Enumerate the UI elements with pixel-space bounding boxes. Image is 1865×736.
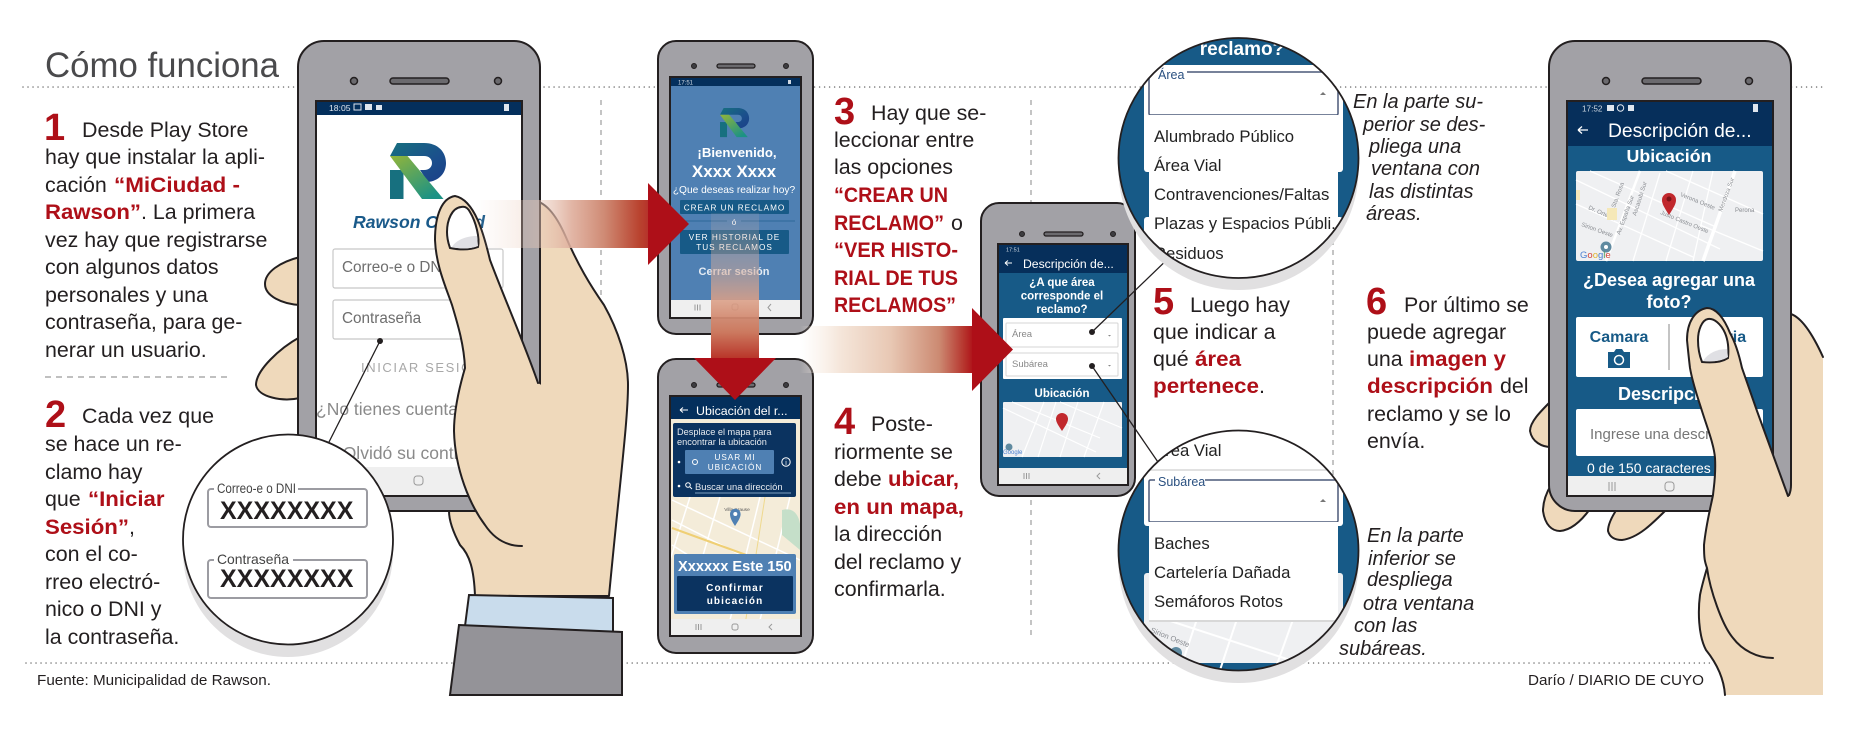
- photo options card: Galeria: [1692, 329, 1746, 346]
- magnifier shadow: [1118, 443, 1358, 683]
- hand back: left fingers: [256, 257, 300, 399]
- step 1 copy: cación: [45, 173, 113, 197]
- jacket sleeve: [450, 625, 622, 695]
- header: [670, 396, 801, 419]
- step 2 copy: con el co-: [45, 542, 138, 566]
- character counter: 0 de 150 caracteres (máx): [1587, 460, 1750, 476]
- text block: step 6: [1366, 281, 1529, 453]
- app name: Rawson Ciudad: [353, 212, 486, 232]
- step 6 copy: descripción: [1367, 374, 1493, 398]
- step 4 copy: ubicar,: [888, 467, 959, 491]
- number 5: 5: [1153, 281, 1174, 323]
- magnifier: subarea dropdown: [1118, 425, 1359, 683]
- credit: Darío / DIARIO DE CUYO: [1528, 672, 1704, 689]
- arrow: step 3 to step 4: [711, 213, 759, 358]
- annotation: bottom dropdown: subáreas.: [1339, 638, 1427, 660]
- step 2 copy: “Iniciar: [88, 487, 164, 511]
- map: Verona Oeste: [1679, 192, 1716, 212]
- arrow: step 1 to step 3: [475, 200, 648, 248]
- description input: Ingrese una descripción: [1590, 426, 1749, 443]
- instructions panel: USAR MI: [714, 453, 756, 462]
- status bar: 17:51: [678, 80, 694, 86]
- divider with letter o: [675, 218, 795, 227]
- screen background: [670, 77, 801, 318]
- map: Sirion Oeste: [1580, 222, 1614, 239]
- photo options card: [1576, 317, 1763, 377]
- dotted rule bottom: [26, 662, 1713, 664]
- step 6 copy: Por último se: [1404, 293, 1529, 317]
- column divider 1: [600, 100, 602, 636]
- step 4 copy: Poste-: [871, 412, 933, 436]
- magnifier content: [1118, 38, 1359, 287]
- text block: step 2: [45, 394, 214, 649]
- earpiece and sensors: [1602, 78, 1752, 84]
- step 2 copy: Sesión”: [45, 515, 129, 539]
- divider with letter o: ó: [732, 218, 737, 227]
- step 5 copy: que indicar a: [1153, 320, 1276, 344]
- step 4 copy: confirmarla.: [834, 577, 946, 601]
- instructions panel: i: [785, 460, 787, 467]
- number 6: 6: [1366, 281, 1387, 323]
- step 4 copy: la dirección: [834, 522, 942, 546]
- text block: step 3: [834, 91, 986, 317]
- phone body: [658, 359, 813, 653]
- status bar: 18:05: [329, 103, 351, 113]
- step 3 copy: o: [951, 211, 963, 235]
- nav bar: [671, 300, 800, 317]
- step 1 copy: Desde Play Store: [82, 118, 248, 142]
- instructions panel: Desplace el mapa para: [677, 427, 772, 437]
- dropdown options: Baches: [1154, 534, 1210, 553]
- field: password: XXXXXXXX: [220, 565, 354, 593]
- dropdown options: Alumbrado Público: [1154, 127, 1294, 146]
- annotation: top dropdown: pliega una: [1368, 136, 1461, 158]
- description heading: Descripción: [1618, 384, 1721, 404]
- dropdown options: Residuos: [1154, 244, 1224, 263]
- illustration: hand holding phone 5: [1530, 41, 1823, 695]
- header: Ubicación del r...: [696, 404, 788, 418]
- step 3 copy: RECLAMOS”: [834, 293, 956, 317]
- text block: step 5: [1153, 281, 1290, 398]
- annotation: top dropdown: ventana con: [1371, 158, 1480, 180]
- photo question: ¿Desea agregar una: [1583, 270, 1756, 290]
- small map: Google: [1003, 450, 1023, 456]
- dropdown options: [1149, 115, 1340, 272]
- wrist outline: [1699, 568, 1725, 695]
- address panel: ubicación: [707, 596, 763, 607]
- step 6 copy: envía.: [1367, 429, 1425, 453]
- map: Justo Castro Oeste: [1659, 210, 1710, 235]
- instructions panel: encontrar la ubicación: [677, 437, 767, 447]
- question: [1021, 277, 1103, 316]
- map: Google: [1580, 250, 1611, 261]
- arrow head: step 3 to step 4: [694, 358, 776, 400]
- magnifier: login fields: [183, 434, 393, 657]
- dropdown options: Plazas y Espacios Públi..: [1154, 214, 1340, 233]
- step 6 copy: del: [1500, 374, 1529, 398]
- location heading: Ubicación: [1627, 146, 1711, 166]
- leader line to top magnifier: [1089, 252, 1175, 335]
- step 2 copy: rreo electró-: [45, 570, 160, 594]
- step 6 copy: una: [1367, 347, 1409, 371]
- step 3 copy: “CREAR UN: [834, 183, 948, 207]
- button: ver historial: TUS RECLAMOS: [696, 243, 773, 252]
- app logo: [390, 143, 446, 199]
- magnifier content: [1118, 425, 1359, 671]
- header: Descripción de...: [1023, 257, 1114, 271]
- input: password: Contraseña: [342, 310, 422, 327]
- magnifier: area dropdown: [1118, 38, 1359, 290]
- address panel: Confirmar: [706, 583, 764, 594]
- instructions panel: Buscar una dirección: [695, 481, 783, 492]
- select card: Subárea: [1012, 359, 1049, 370]
- sign out: Cerrar sesión: [699, 266, 770, 278]
- earpiece and sensors: [350, 78, 502, 84]
- field: email: XXXXXXXX: [220, 497, 354, 525]
- address panel: [674, 554, 796, 614]
- step 2 copy: nico o DNI y: [45, 597, 162, 621]
- question: ¿Que deseas realizar hoy?: [673, 185, 795, 196]
- step 1 copy: hay que instalar la apli-: [45, 145, 265, 169]
- forgot link: ¿Olvidó su contraseña?: [332, 443, 517, 463]
- magnifier lens: [183, 434, 393, 644]
- step 2 copy: se hace un re-: [45, 432, 182, 456]
- step 2 copy: clamo hay: [45, 460, 143, 484]
- button: crear reclamo: CREAR UN RECLAMO: [684, 204, 785, 212]
- step 1 copy: “MiCiudad -: [114, 173, 240, 197]
- map: Perona: [1735, 208, 1755, 214]
- annotation: bottom dropdown: En la parte: [1367, 525, 1464, 547]
- dropdown options: [1149, 522, 1338, 621]
- nav bar: [1567, 476, 1773, 496]
- card: [1144, 425, 1343, 526]
- step 1 copy: con algunos datos: [45, 255, 219, 279]
- header: Descripción de...: [1608, 121, 1752, 142]
- hand back: palm fill: [1699, 313, 1823, 695]
- phone 3: map location: [658, 359, 813, 653]
- step 5 copy: área: [1195, 347, 1242, 371]
- thumb outline: [435, 196, 538, 546]
- annotation: top dropdown: perior se des-: [1362, 114, 1486, 136]
- map label and pin: [724, 507, 750, 526]
- phone body: [658, 41, 813, 334]
- text block: step 1: [44, 107, 267, 362]
- screen: [316, 101, 522, 496]
- small map: [1003, 402, 1122, 457]
- step 1 copy: . La primera: [141, 200, 255, 224]
- screen content: [1567, 101, 1773, 496]
- map: [1576, 171, 1763, 261]
- leader line to login fields: [329, 338, 383, 442]
- earpiece and sensors: [692, 382, 788, 388]
- palm outline: [1791, 314, 1823, 357]
- select card: [1003, 318, 1122, 379]
- step 3 copy: “VER HISTO-: [834, 238, 958, 262]
- map background: [671, 419, 800, 619]
- photo question: foto?: [1647, 292, 1691, 312]
- illustration: hand holding phone 1: [256, 41, 628, 695]
- question: reclamo?: [1036, 304, 1088, 316]
- annotation: top dropdown: áreas.: [1366, 203, 1422, 225]
- number 1: 1: [44, 107, 65, 149]
- welcome heading: ¡Bienvenido,: [697, 145, 777, 160]
- button: ver historial: [680, 230, 789, 254]
- nav bar: [670, 619, 801, 636]
- step 1 copy: contraseña, para ge-: [45, 310, 242, 334]
- thumb nail: [1698, 319, 1728, 362]
- field: password: [208, 551, 367, 598]
- photo question: [1583, 270, 1756, 312]
- phone 4: area selection: [981, 203, 1135, 496]
- annotation: top dropdown: En la parte su-: [1353, 91, 1483, 113]
- number 3: 3: [834, 91, 855, 133]
- step 6 copy: puede agregar: [1367, 320, 1506, 344]
- step 4 copy: riormente se: [834, 440, 953, 464]
- map label and pin: Villa Krause: [724, 507, 750, 513]
- phone body: [298, 41, 540, 511]
- step 2 copy: ,: [129, 515, 135, 539]
- magnifier shadow: [1118, 50, 1358, 290]
- map pin: [1662, 193, 1676, 215]
- nav bar: [366, 467, 467, 495]
- description input: [1576, 409, 1763, 456]
- input: password: [332, 299, 460, 340]
- step 3 copy: Hay que se-: [871, 101, 986, 125]
- dropdown options: Área Vial: [1154, 156, 1221, 175]
- step 5 copy: Luego hay: [1190, 293, 1290, 317]
- phone 1: [298, 41, 540, 511]
- shirt cuff: [465, 595, 613, 632]
- map: Av. España Sur: [1616, 195, 1636, 236]
- arrow head: step 1 to step 3: [648, 183, 689, 265]
- step 2 copy: Cada vez que: [82, 404, 214, 428]
- status bar: [316, 101, 522, 115]
- step 1 copy: nerar un usuario.: [45, 338, 207, 362]
- column divider 3: [1332, 100, 1334, 636]
- select field: Subárea: [1158, 475, 1205, 489]
- field: email: [208, 481, 367, 527]
- nav icons: [1024, 473, 1100, 479]
- address panel: Xxxxxx Este 150: [678, 559, 792, 575]
- input: email: Correo-e o DNI: [342, 259, 446, 276]
- screen content: [670, 396, 801, 636]
- phone 2: welcome screen: [658, 41, 813, 334]
- map: Mendoza Sur: [1718, 177, 1736, 213]
- previous selection: Área Vial: [1154, 441, 1221, 460]
- register link: ¿No tienes cuenta?: [316, 399, 468, 419]
- dropdown options: Semáforos Rotos: [1154, 592, 1283, 611]
- instructions panel: UBICACIÓN: [708, 462, 762, 472]
- field: password: Contraseña: [217, 551, 289, 567]
- step 1 copy: vez hay que registrarse: [45, 228, 267, 252]
- step 4 copy: en un mapa,: [834, 495, 964, 519]
- step 6 copy: reclamo y se lo: [1367, 402, 1511, 426]
- phone 5: [1549, 41, 1791, 511]
- login screen content: [316, 101, 522, 496]
- source note: Fuente: Municipalidad de Rawson.: [37, 672, 271, 689]
- map: Dr. Ortega: [1587, 205, 1616, 222]
- select field: [1149, 67, 1338, 115]
- text block: step 4: [834, 401, 964, 601]
- phone body: [1549, 41, 1791, 511]
- step 2 copy: la contraseña.: [45, 625, 179, 649]
- dotted rule top: [23, 86, 1822, 88]
- input: email: [333, 249, 503, 288]
- card: [1144, 65, 1343, 172]
- step 1 copy: personales y una: [45, 283, 208, 307]
- annotation: bottom dropdown: despliega: [1367, 569, 1453, 591]
- step 3 copy: RIAL DE TUS: [834, 266, 958, 290]
- thumb outline: [1687, 308, 1788, 658]
- leader line to bottom magnifier: [1089, 363, 1160, 465]
- step 5 copy: pertenece: [1153, 374, 1259, 398]
- step 3 copy: RECLAMO”: [834, 211, 944, 235]
- select field: [1149, 475, 1338, 522]
- earpiece and sensors: [692, 64, 788, 68]
- arrow: step 3 to step 5: [800, 326, 972, 373]
- step 4 copy: del reclamo y: [834, 550, 962, 574]
- earpiece and sensors: [1020, 232, 1116, 236]
- select card: Área: [1012, 329, 1033, 340]
- map card: [1144, 573, 1343, 670]
- screen content: [998, 244, 1128, 485]
- magnifier shadow: [183, 447, 393, 657]
- step 5 copy: .: [1259, 374, 1265, 398]
- thumb nail: [447, 207, 479, 249]
- annotation: bottom dropdown: inferior se: [1368, 548, 1456, 570]
- field: email: Correo-e o DNI: [217, 481, 296, 496]
- step 3 copy: leccionar entre: [834, 128, 974, 152]
- title: Cómo funciona: [45, 46, 280, 85]
- step 4 copy: debe: [834, 467, 888, 491]
- header: 17:52: [1582, 104, 1603, 114]
- button: crear reclamo: [680, 200, 789, 214]
- button: ver historial: VER HISTORIAL DE: [689, 233, 780, 242]
- magnifier rim: [1118, 430, 1358, 670]
- question: ¿A que área: [1029, 277, 1095, 289]
- step 5 copy: qué: [1153, 347, 1195, 371]
- map: Ascasubi Sur: [1632, 181, 1649, 217]
- step 6 copy: imagen y: [1409, 347, 1506, 371]
- status bar: [671, 78, 800, 86]
- column divider 2: [1030, 100, 1032, 636]
- step 2 copy: que: [45, 487, 87, 511]
- user name: Xxxx Xxxx: [692, 162, 777, 181]
- header: [998, 244, 1128, 273]
- app logo: [720, 108, 749, 137]
- number 4: 4: [834, 401, 855, 443]
- instructions panel: [673, 423, 796, 497]
- header: 17:51: [1006, 248, 1020, 254]
- annotation: bottom dropdown: con las: [1354, 615, 1417, 637]
- camera icon: [1608, 349, 1630, 368]
- dropdown options: Cartelería Dañada: [1154, 563, 1291, 582]
- step 3 copy: las opciones: [834, 155, 953, 179]
- login button text: INICIAR SESIÓN: [361, 360, 484, 375]
- hand front: thumb and palm fill: [1687, 308, 1823, 658]
- number 2: 2: [45, 394, 66, 436]
- annotation: top dropdown: las distintas: [1369, 181, 1474, 203]
- zoomed question: reclamo?: [1200, 39, 1284, 60]
- hand back: left fingers: [1530, 401, 1667, 540]
- annotation: bottom dropdown: otra ventana: [1363, 593, 1474, 615]
- header: [1567, 101, 1773, 146]
- location heading: Ubicación: [1035, 388, 1089, 400]
- phone body: [981, 203, 1135, 496]
- next section stub: [998, 468, 1128, 485]
- photo options card: Camara: [1590, 329, 1648, 346]
- arrow head: step 3 to step 5: [972, 308, 1013, 391]
- question: corresponde el: [1021, 290, 1103, 302]
- dropdown options: Contravenciones/Faltas: [1154, 185, 1329, 204]
- hand back: palm and wrist: [449, 200, 628, 596]
- map card: Sirion Oeste: [1149, 626, 1191, 649]
- magnifier rim: [1118, 38, 1358, 278]
- hand front: thumb and palm fill: [435, 196, 600, 546]
- map: Sta. Rosa: [1611, 181, 1626, 209]
- select field: Área: [1158, 67, 1184, 82]
- step 1 copy: Rawson”: [45, 200, 141, 224]
